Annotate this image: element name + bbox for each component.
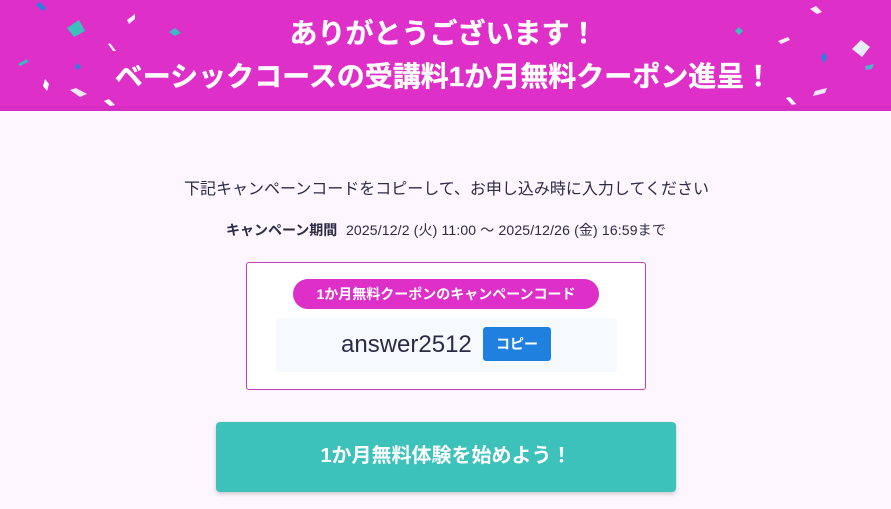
- banner heading: [115, 18, 772, 92]
- banner heading: ベーシックコースの受講料1か月無料クーポン進呈！: [115, 61, 772, 92]
- copy button: [483, 327, 551, 361]
- header banner: [0, 0, 891, 111]
- coupon label pill: 1か月無料クーポンのキャンペーンコード: [316, 286, 576, 302]
- banner heading: ありがとうございます！: [289, 18, 598, 49]
- call to action button: [216, 422, 676, 492]
- campaign period: 2025/12/2 (火) 11:00 ～ 2025/12/26 (金) 16:59まで: [346, 222, 666, 238]
- campaign period: キャンペーン期間: [226, 222, 337, 238]
- coupon panel: [246, 262, 646, 390]
- call to action button: 1か月無料体験を始めよう！: [320, 445, 572, 467]
- coupon code: answer2512: [341, 331, 472, 358]
- coupon label pill: [293, 279, 599, 309]
- confetti decoration: [18, 2, 874, 106]
- code row: [276, 318, 617, 372]
- banner bottom band: [0, 106, 891, 111]
- copy button: コピー: [496, 336, 538, 352]
- instruction text: 下記キャンペーンコードをコピーして、お申し込み時に入力してください: [184, 181, 709, 198]
